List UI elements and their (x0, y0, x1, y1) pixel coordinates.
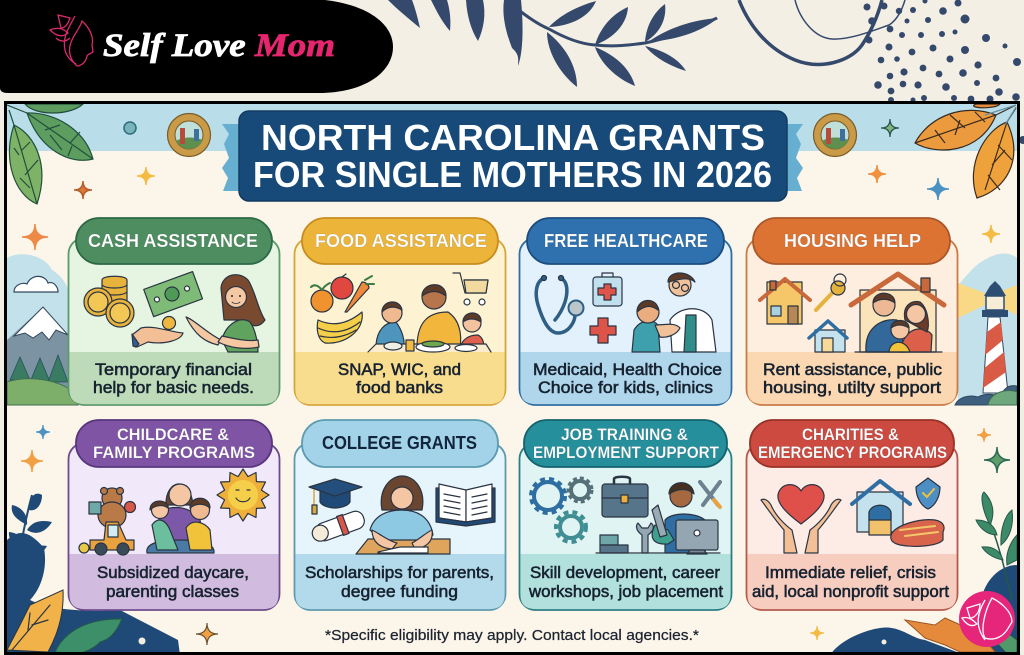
logo wordmark: Self Love Mom (103, 28, 335, 64)
icon: stethoscope, kit and doctor (536, 273, 716, 352)
pine trees (10, 355, 68, 382)
description: degree funding (341, 583, 458, 601)
green branch (976, 492, 1017, 600)
sky band (7, 104, 1017, 151)
description: aid, local nonprofit support (752, 583, 949, 601)
footnote: *Specific eligibility may apply. Contact local agencies.* (325, 627, 699, 644)
orange leaf (905, 618, 995, 652)
pink logo badge (959, 591, 1015, 647)
heading: HOUSING HELP (784, 231, 921, 251)
panel: job training and employment support (520, 420, 732, 610)
icon: food, cart and family meal (311, 273, 491, 352)
hill (7, 379, 78, 405)
sparkles (21, 119, 1010, 645)
title ribbon (222, 124, 803, 191)
panel: college grants (294, 420, 506, 610)
description: housing, utilty support (763, 379, 941, 397)
description: workshops, job placement (528, 583, 723, 601)
description: Rent assistance, public (763, 361, 942, 379)
title text: NORTH CAROLINA GRANTS (261, 117, 765, 158)
navy branch decoration (388, 0, 718, 87)
description: Temporary financial (95, 361, 252, 379)
heading: CASH ASSISTANCE (88, 231, 258, 251)
icon: houses, key and family (760, 274, 944, 352)
heading: JOB TRAINING & (561, 425, 688, 444)
panel: food assistance (294, 218, 506, 405)
curved line decoration (739, 0, 905, 64)
panel: housing help (746, 218, 958, 405)
description: Immediate relief, crisis (765, 564, 936, 582)
bottom-left foliage (7, 494, 180, 655)
icon: cap, diploma, student and book (309, 476, 495, 554)
state seal right (814, 114, 856, 156)
navy plant (8, 494, 52, 550)
state seal left (168, 114, 210, 156)
heading: CHARITIES & (802, 425, 899, 444)
description: Skill development, career (530, 564, 721, 582)
description: food banks (356, 379, 443, 397)
logo icon: woman face and butterfly (50, 15, 93, 66)
lighthouse (982, 281, 1008, 393)
panel: free healthcare (520, 218, 732, 405)
cloud (14, 276, 58, 292)
right landscape (955, 254, 1017, 405)
heading: FOOD ASSISTANCE (315, 231, 487, 251)
description: Choice for kids, clinics (538, 379, 713, 397)
logo banner (0, 0, 393, 93)
heading: CHILDCARE & (117, 425, 229, 444)
title text: FOR SINGLE MOTHERS IN 2026 (253, 154, 772, 195)
left landscape (7, 254, 78, 405)
top-left leaves (7, 104, 93, 204)
light beams (958, 283, 1017, 318)
heading: FREE HEALTHCARE (544, 231, 708, 251)
description: Scholarships for parents, (305, 564, 494, 582)
panel: cash assistance (68, 218, 280, 405)
bottom-right foliage (830, 492, 1017, 655)
heading: EMPLOYMENT SUPPORT (533, 443, 720, 462)
icon: toys, family and sun (79, 469, 269, 555)
mountain (7, 314, 68, 388)
description: Medicaid, Health Choice (533, 361, 722, 379)
dot pattern decoration (864, 0, 1024, 144)
icon: heart, hands, shelter and blanket (761, 478, 944, 553)
heading: COLLEGE GRANTS (322, 433, 477, 453)
description: SNAP, WIC, and (338, 361, 461, 379)
icon: coins, cash and woman (84, 272, 265, 352)
small teal ring (124, 122, 136, 134)
description: parenting classes (106, 583, 239, 601)
title banner (239, 111, 787, 201)
heading: FAMILY PROGRAMS (93, 443, 255, 462)
description: Subsidized daycare, (97, 564, 249, 582)
panel: charities and emergency programs (746, 420, 958, 610)
heading: EMERGENCY PROGRAMS (758, 443, 947, 462)
panel: childcare and family programs (68, 420, 280, 610)
icon: gears, briefcase and worker (531, 477, 720, 554)
description: help for basic needs. (93, 379, 254, 397)
coastal bushes (955, 386, 1017, 405)
top-right leaves (915, 104, 1016, 198)
